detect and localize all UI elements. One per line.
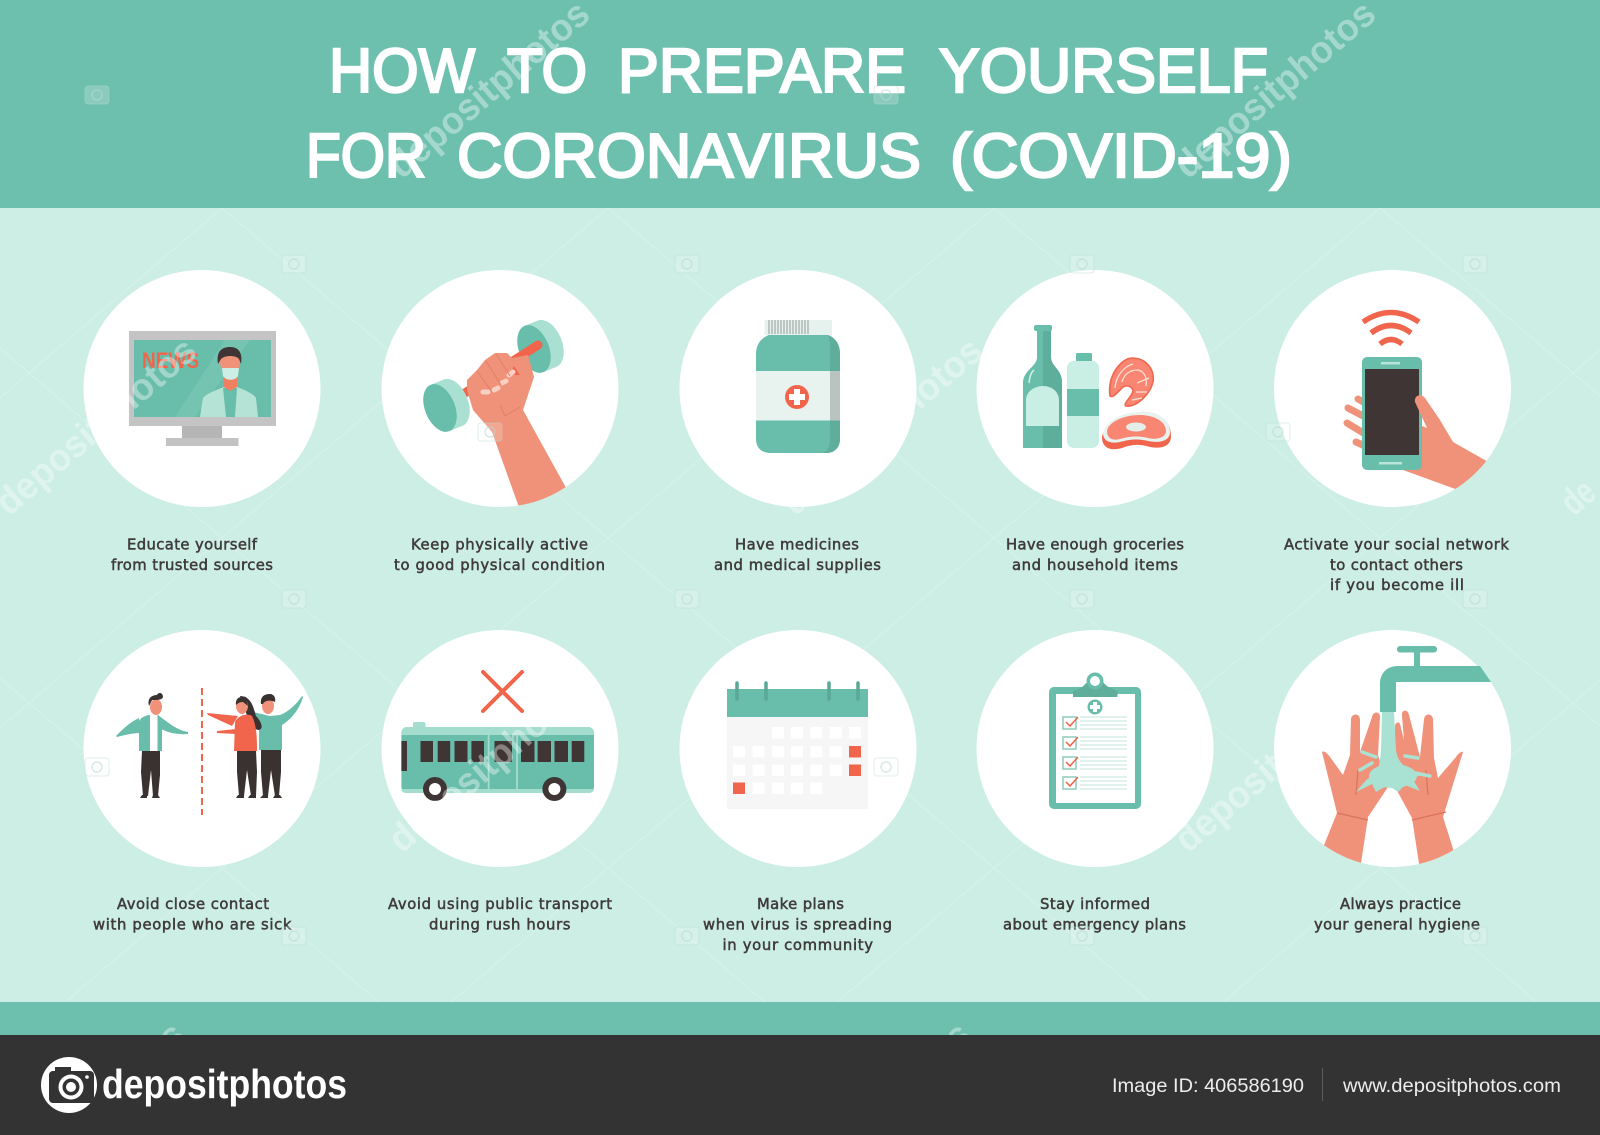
- icon: hand holding phone with wifi: [1347, 312, 1490, 490]
- icon: news on monitor: NEWS: [142, 348, 199, 373]
- panel: educate yourself: [84, 270, 320, 574]
- watermark overlay: depositphotos: [774, 330, 991, 524]
- website url: www.depositphotos.com: [1342, 1075, 1561, 1097]
- caption: [703, 896, 892, 954]
- icon: clipboard checklist: [1049, 672, 1141, 809]
- caption: Stay informed: [1040, 896, 1150, 913]
- image id: Image ID: 406586190: [1112, 1075, 1304, 1097]
- caption: Always practice: [1340, 896, 1461, 913]
- caption: [93, 896, 292, 934]
- panel: make plans: [680, 630, 916, 954]
- caption: Avoid using public transport: [388, 896, 612, 913]
- caption: [1284, 536, 1509, 594]
- panel: avoid close contact: [84, 630, 320, 934]
- panel: activate social network: [1274, 270, 1511, 594]
- watermark overlay: depositphotos: [1167, 667, 1384, 861]
- footer band: [0, 1002, 1600, 1035]
- caption: [1006, 536, 1184, 574]
- title: PREPARE: [618, 37, 906, 106]
- caption: and medical supplies: [714, 557, 881, 574]
- panel: have medicines: [680, 270, 916, 574]
- icon: news on monitor: [129, 331, 276, 446]
- caption: Avoid close contact: [117, 896, 269, 913]
- caption: to good physical condition: [394, 557, 605, 574]
- caption: Make plans: [757, 896, 844, 913]
- icon: camera logo: [41, 1057, 97, 1113]
- caption: [1314, 896, 1480, 934]
- caption: [394, 536, 605, 574]
- caption: Keep physically active: [411, 536, 588, 554]
- caption: [1003, 896, 1186, 934]
- caption: about emergency plans: [1003, 916, 1186, 934]
- icon: calendar: [727, 683, 868, 809]
- panel: keep physically active: [382, 270, 618, 574]
- panel: general hygiene: [1274, 630, 1511, 934]
- caption: [714, 536, 881, 574]
- caption: from trusted sources: [111, 557, 273, 574]
- icon: hands washing under tap: [1320, 646, 1491, 870]
- caption: in your community: [722, 937, 873, 954]
- caption: to contact others: [1330, 557, 1463, 574]
- icon: bus: [401, 722, 594, 801]
- title: FOR: [306, 122, 426, 191]
- title: [306, 37, 1292, 191]
- caption: [111, 536, 273, 574]
- caption: if you become ill: [1330, 577, 1464, 594]
- panel: avoid public transport: [382, 630, 618, 934]
- title: CORONAVIRUS: [457, 122, 921, 191]
- title: YOURSELF: [939, 37, 1268, 106]
- header banner: [0, 0, 1600, 208]
- caption: Have medicines: [735, 536, 859, 554]
- panel: stay informed: [976, 630, 1214, 934]
- icon: social distancing people: [116, 688, 303, 815]
- panel: have groceries: [976, 270, 1214, 574]
- logo wordmark: depositphotos: [102, 1061, 347, 1107]
- title: HOW: [329, 37, 475, 106]
- icon: medicine bottle: [756, 320, 840, 453]
- caption: your general hygiene: [1314, 916, 1480, 934]
- title: (COVID-19): [950, 122, 1292, 191]
- caption: Have enough groceries: [1006, 536, 1184, 554]
- watermark overlay: depositphotos: [381, 667, 598, 861]
- caption: and household items: [1012, 557, 1178, 574]
- watermark overlay: s: [937, 1014, 979, 1059]
- title: TO: [507, 37, 587, 106]
- caption: Activate your social network: [1284, 536, 1509, 554]
- caption: during rush hours: [429, 916, 570, 934]
- caption: when virus is spreading: [703, 916, 892, 934]
- caption: with people who are sick: [93, 916, 292, 934]
- footer bar: [0, 1035, 1600, 1135]
- caption: Educate yourself: [127, 536, 258, 554]
- icon: bottles and food: [1023, 325, 1171, 449]
- caption: [388, 896, 612, 934]
- icon: hand with dumbbell: [423, 320, 566, 506]
- watermark overlay: s: [151, 1014, 193, 1059]
- icon: cross mark: [483, 672, 522, 711]
